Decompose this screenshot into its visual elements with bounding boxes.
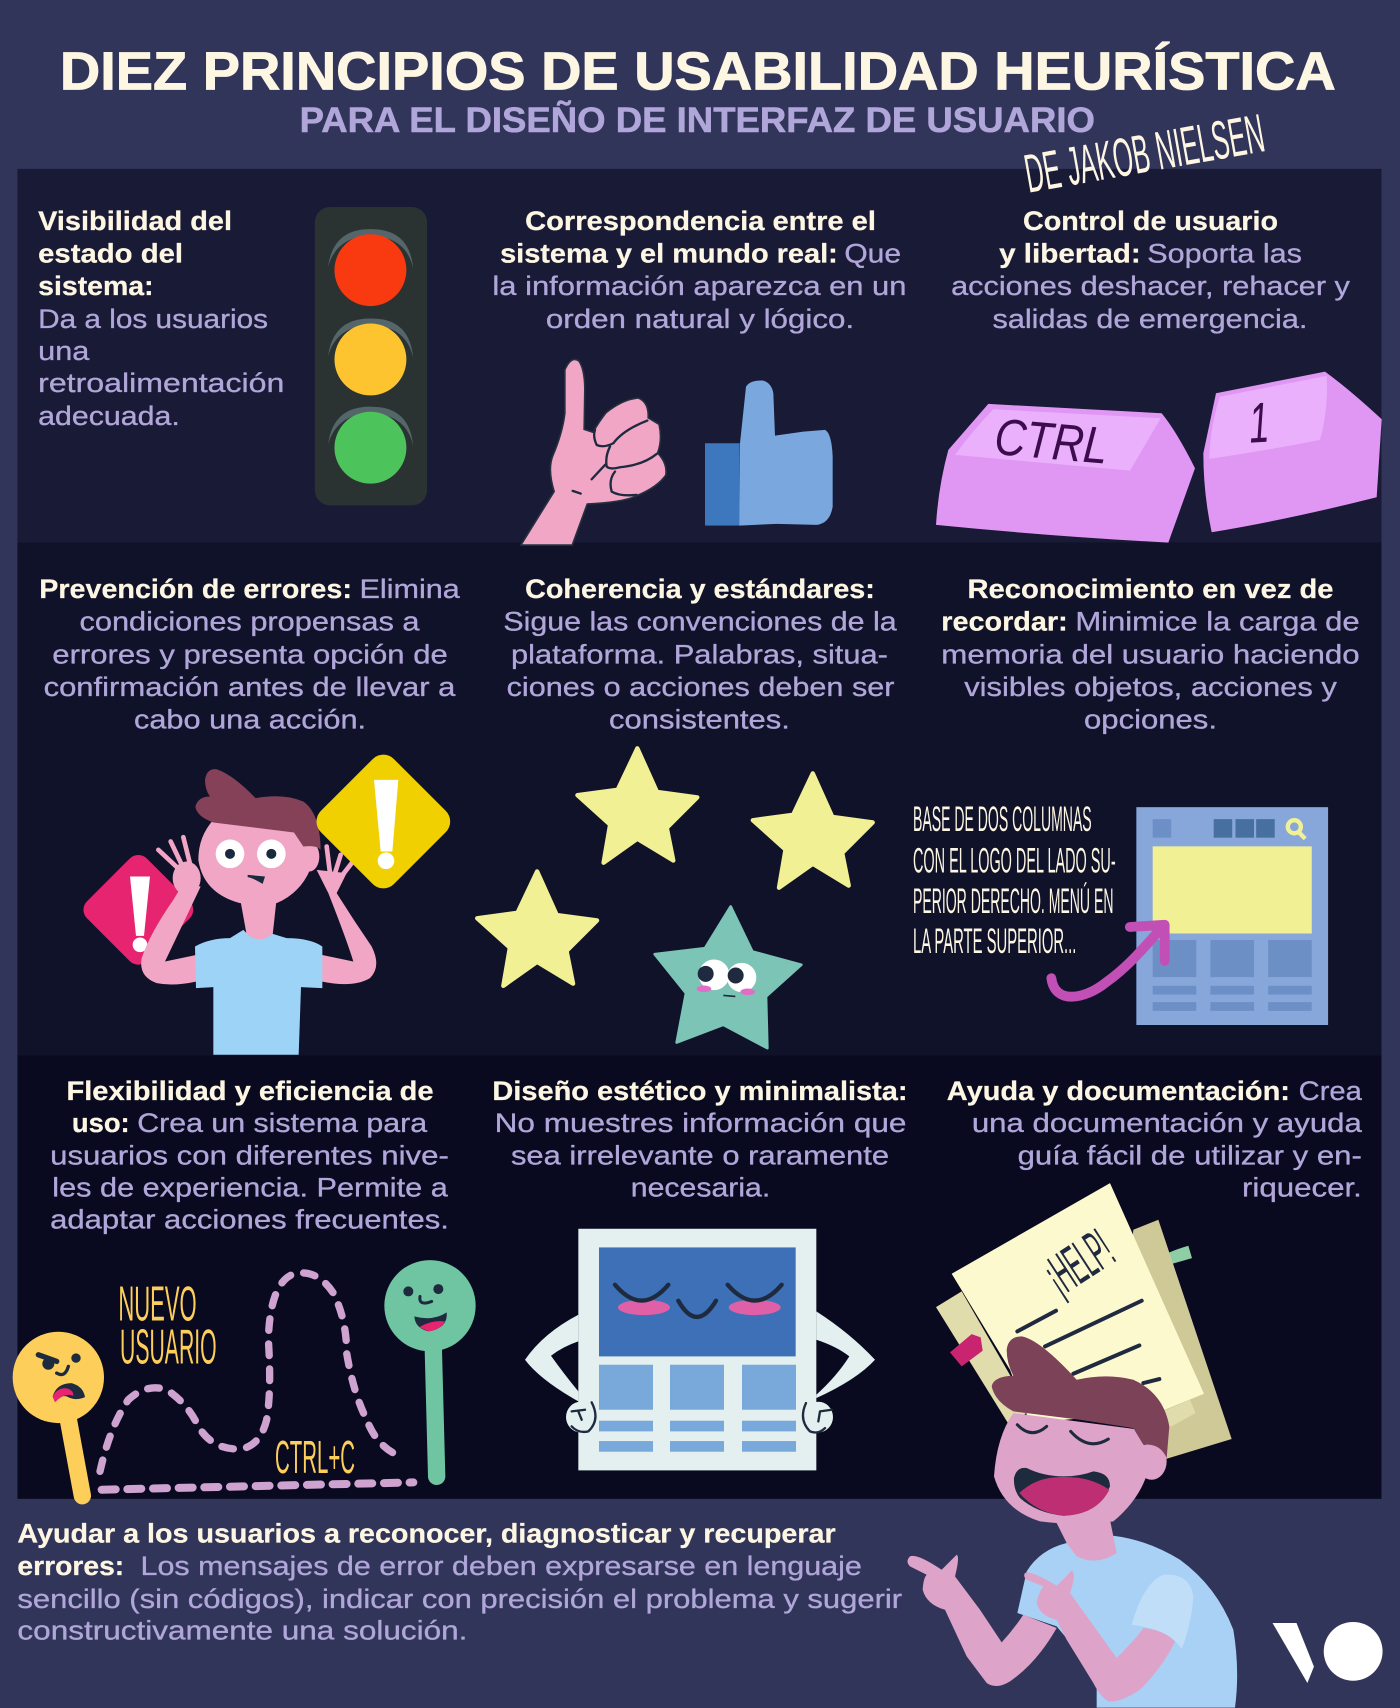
- text block: diseno: Diseño estético y minimalista:: [492, 1075, 908, 1106]
- text block: control de usuario: acciones deshacer, rehacer y: [951, 270, 1350, 301]
- text block: flexibilidad: [50, 1075, 449, 1235]
- text block: correspondencia: sistema y el mundo real:: [500, 238, 838, 269]
- text block: reconocimiento: visibles objetos, acciones y: [964, 671, 1337, 702]
- text block: prevencion: Elimina: [360, 573, 461, 604]
- text block: ayuda: Crea: [1299, 1075, 1363, 1106]
- text block: prevencion: [39, 573, 461, 735]
- icon: one key: [1203, 372, 1382, 532]
- icon: warning yellow: [310, 748, 456, 895]
- arrow: [1051, 925, 1165, 997]
- text block: reconocimiento: [941, 573, 1360, 735]
- text block: control de usuario: [951, 205, 1350, 334]
- text block: diseno: necesaria.: [631, 1172, 770, 1203]
- text block: prevencion: Prevención de errores:: [39, 573, 352, 604]
- text block: flexibilidad: usuarios con diferentes nive-: [50, 1139, 449, 1170]
- text block: visibilidad: adecuada.: [38, 400, 180, 431]
- text block: visibilidad: retroalimentación: [38, 367, 284, 398]
- text block: ayudar a los usuarios: sencillo (sin códigos), indicar con precisión el problema y sugerir: [17, 1583, 902, 1614]
- text block: flexibilidad: Crea un sistema para: [137, 1107, 428, 1138]
- text block: diseno: [492, 1075, 908, 1203]
- icon: star 1: [577, 748, 697, 863]
- text block: prevencion: errores y presenta opción de: [52, 638, 448, 669]
- logo: [1273, 1622, 1383, 1683]
- text block: visibilidad: una: [38, 335, 90, 366]
- text block: ayuda: riquecer.: [1242, 1172, 1362, 1203]
- text block: control de usuario: y libertad:: [999, 238, 1141, 269]
- icon: ctrl key: CTRL: [992, 407, 1110, 475]
- text block: visibilidad: estado del: [38, 238, 183, 269]
- text block: flexibilidad: uso:: [72, 1107, 130, 1138]
- text block: ayuda: [947, 1075, 1363, 1203]
- text block: prevencion: cabo una acción.: [134, 704, 366, 735]
- icon: star 3: [477, 871, 597, 986]
- text block: reconocimiento: Reconocimiento en vez de: [967, 573, 1334, 604]
- text block: ayuda: Ayuda y documentación:: [947, 1075, 1290, 1106]
- icon: hand thumbs up: [522, 360, 665, 544]
- text block: ayudar a los usuarios: [17, 1517, 902, 1645]
- text block: prevencion: condiciones propensas a: [80, 606, 420, 637]
- text block: coherencia: ciones o acciones deben ser: [507, 671, 894, 702]
- chart: learning curve: [100, 1273, 413, 1490]
- handwritten note: LA PARTE SUPERIOR...: [913, 922, 1076, 961]
- text block: reconocimiento: recordar:: [941, 606, 1068, 637]
- text block: reconocimiento: Minimice la carga de: [1075, 606, 1360, 637]
- subtitle: PARA EL DISEÑO DE INTERFAZ DE USUARIO: [300, 101, 1095, 140]
- illustration: help documents: ¡HELP!: [1033, 1218, 1125, 1308]
- text: PERIOR DERECHO. MENÚ EN: [913, 882, 1113, 921]
- icon: star 2: [753, 773, 873, 888]
- icon: angry yellow lollipop: [13, 1332, 104, 1496]
- chart: learning curve: NUEVO: [118, 1278, 197, 1332]
- text block: flexibilidad: les de experiencia. Permite a: [52, 1172, 449, 1203]
- text block: ayudar a los usuarios: constructivamente una solución.: [17, 1614, 467, 1645]
- icon: ctrl key: [936, 404, 1195, 543]
- title: DIEZ PRINCIPIOS DE USABILIDAD HEURÍSTICA: [60, 41, 1336, 101]
- illustration: worried person: [141, 769, 376, 1055]
- illustration: explaining person: [908, 1336, 1237, 1708]
- panel: row 1 background: [17, 169, 1381, 542]
- panel: row 3 background: [17, 1056, 1381, 1499]
- text block: ayuda: una documentación y ayuda: [972, 1107, 1363, 1138]
- text block: correspondencia: [492, 205, 906, 334]
- panel: row 2 background: [17, 542, 1381, 1056]
- text block: control de usuario: Control de usuario: [1023, 205, 1278, 236]
- illustration: help documents: [936, 1183, 1232, 1460]
- text block: flexibilidad: adaptar acciones frecuentes.: [50, 1204, 449, 1235]
- text block: ayudar a los usuarios: Los mensajes de error deben expresarse en lenguaje: [141, 1550, 862, 1581]
- text block: diseno: No muestres información que: [495, 1107, 906, 1138]
- icon: happy green lollipop: [384, 1260, 476, 1476]
- chart: learning curve: USUARIO: [120, 1321, 217, 1375]
- text block: coherencia: consistentes.: [609, 704, 790, 735]
- text block: ayuda: guía fácil de utilizar y en-: [1018, 1139, 1362, 1170]
- text: CON EL LOGO DEL LADO SU-: [913, 842, 1116, 881]
- text block: ayudar a los usuarios: Ayudar a los usuarios a reconocer, diagnosticar y recuperar: [17, 1517, 836, 1548]
- text: BASE DE DOS COLUMNAS: [913, 800, 1092, 839]
- text block: reconocimiento: opciones.: [1084, 704, 1217, 735]
- text block: coherencia: plataforma. Palabras, situa-: [511, 638, 888, 669]
- text block: control de usuario: salidas de emergencia.: [993, 303, 1307, 334]
- text block: correspondencia: orden natural y lógico.: [546, 303, 854, 334]
- text block: correspondencia: Correspondencia entre el: [525, 205, 876, 236]
- text block: visibilidad: Da a los usuarios: [38, 303, 268, 334]
- text block: reconocimiento: memoria del usuario haciendo: [941, 638, 1360, 669]
- icon: like button: [705, 381, 833, 526]
- text block: visibilidad: Visibilidad del: [38, 205, 232, 236]
- text block: flexibilidad: Flexibilidad y eficiencia de: [66, 1075, 434, 1106]
- icon: warning pink: [78, 850, 198, 970]
- chart: learning curve: CTRL+C: [275, 1431, 355, 1483]
- text block: coherencia: Coherencia y estándares:: [525, 573, 875, 604]
- text block: visibilidad: [38, 205, 284, 431]
- text block: coherencia: [503, 573, 898, 735]
- text block: coherencia: Sigue las convenciones de la: [503, 606, 898, 637]
- text block: correspondencia: Que: [844, 238, 901, 269]
- icon: teal star with face: [655, 906, 801, 1048]
- illustration: smiling screen: [525, 1229, 875, 1470]
- text block: ayudar a los usuarios: errores:: [17, 1550, 124, 1581]
- text block: correspondencia: la información aparezca en un: [492, 270, 906, 301]
- illustration: page wireframe: [1136, 807, 1328, 1025]
- text block: control de usuario: Soporta las: [1147, 238, 1302, 269]
- icon: traffic light: [315, 207, 427, 505]
- text block: visibilidad: sistema:: [38, 270, 154, 301]
- icon: one key: 1: [1247, 392, 1271, 456]
- text block: diseno: sea irrelevante o raramente: [511, 1139, 889, 1170]
- text block: prevencion: confirmación antes de llevar a: [44, 671, 456, 702]
- handwritten note: [913, 800, 1116, 961]
